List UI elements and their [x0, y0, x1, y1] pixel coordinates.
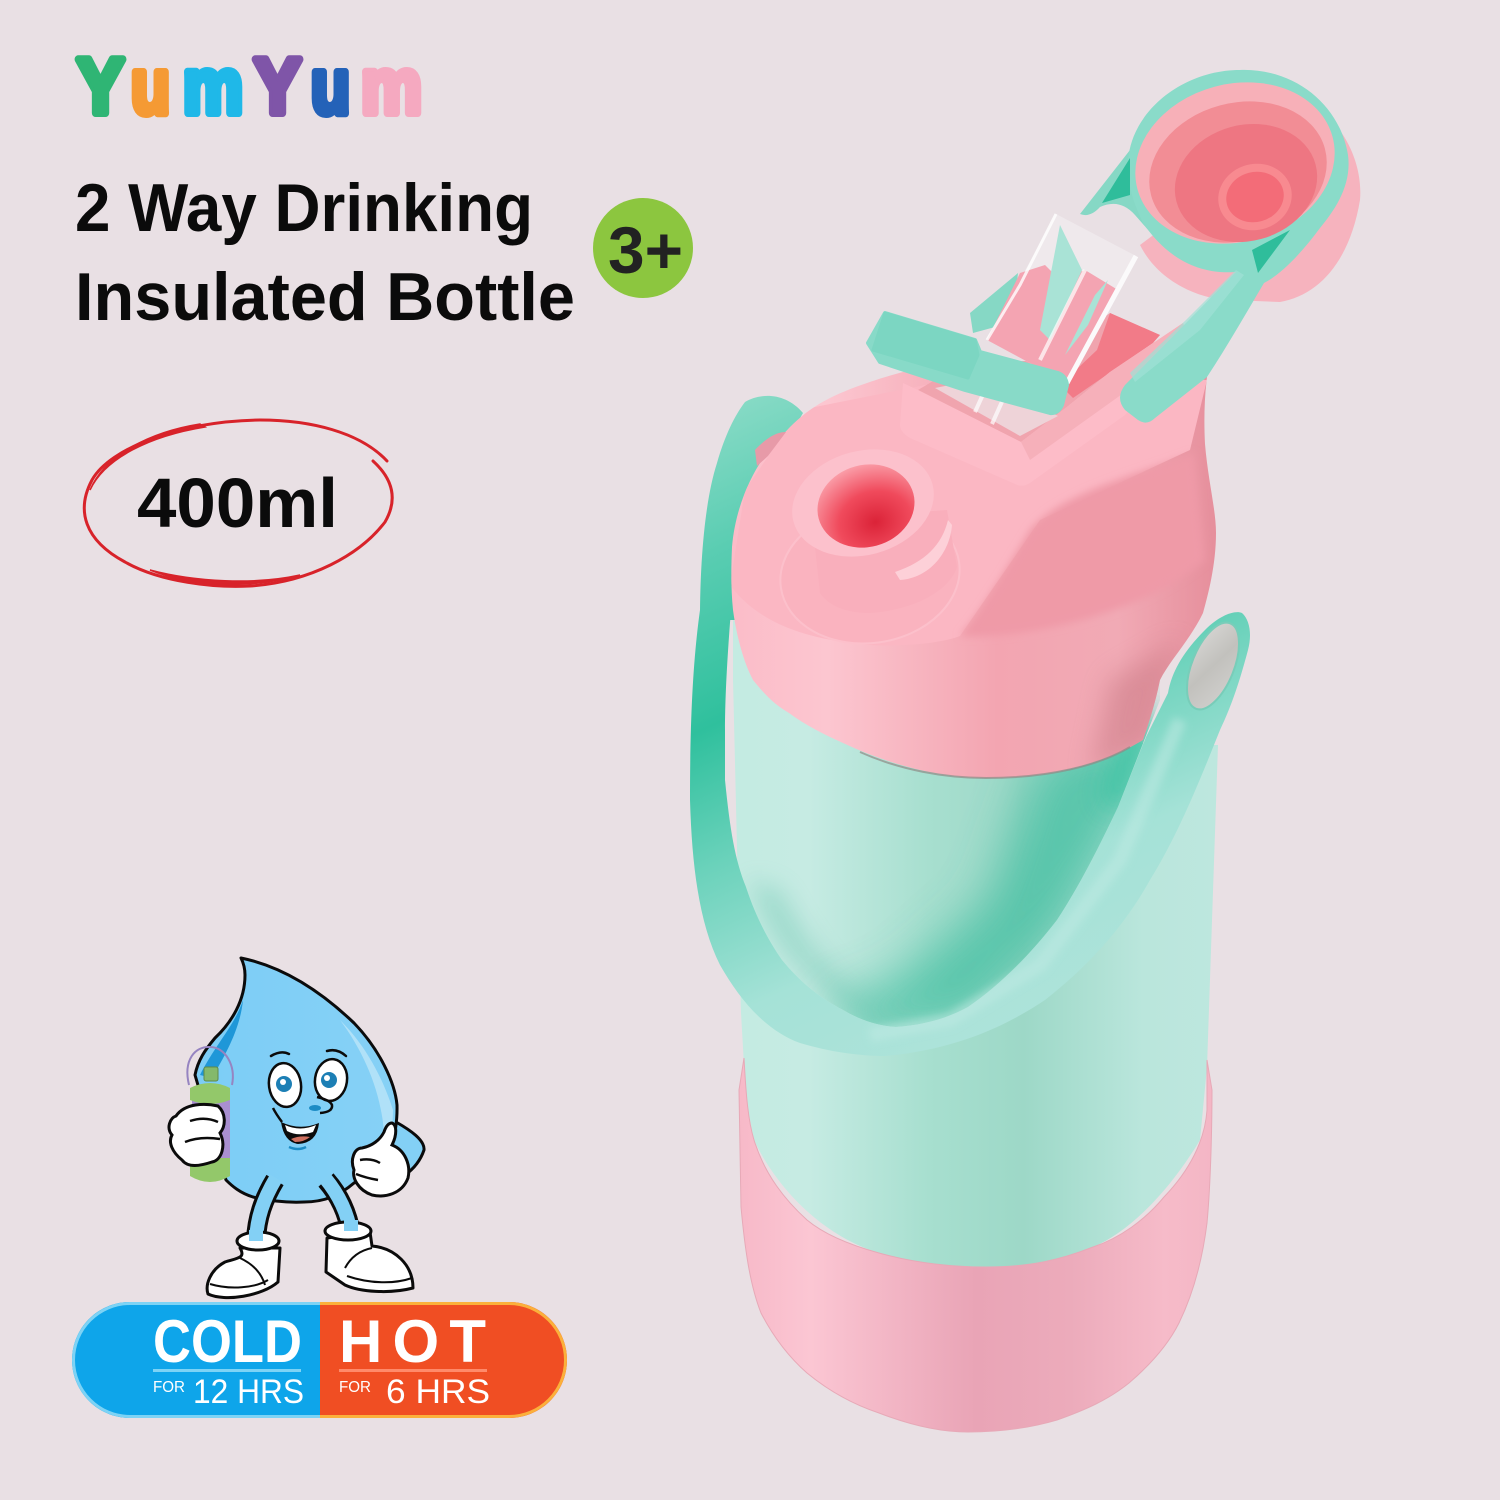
mascot drop body	[195, 958, 397, 1202]
dark gaps in ring	[1102, 158, 1290, 273]
hot label: FOR	[339, 1379, 371, 1396]
spout neck	[812, 510, 957, 613]
logo: YumYum: u	[311, 42, 350, 130]
straw lower part in cavity	[935, 378, 1058, 436]
spout base disc	[771, 495, 969, 655]
back wall	[1060, 313, 1160, 398]
hot half	[320, 1302, 567, 1418]
hot label: HOT	[339, 1308, 486, 1375]
body shadow near strap	[750, 700, 1165, 1035]
title: 2 Way Drinking	[75, 170, 533, 246]
cold label: COLD	[153, 1308, 302, 1375]
cold label: 12 HRS	[193, 1373, 304, 1411]
stud behind strap	[755, 432, 786, 466]
silicone base: pink	[739, 1058, 1212, 1432]
cold label: FOR	[153, 1379, 185, 1396]
logo: YumYum: Y	[77, 42, 124, 130]
mascot: water drop character	[169, 958, 424, 1298]
cap inner cup	[1117, 61, 1353, 265]
lid seam line	[860, 747, 1130, 778]
bottle lid: pink	[730, 370, 1216, 778]
age badge: 3+: 3+	[608, 213, 683, 287]
hot label: 6 HRS	[386, 1373, 490, 1411]
bottle body: mint	[733, 620, 1218, 1267]
ring and carrying arm	[1120, 70, 1349, 423]
mascot legs	[256, 1178, 351, 1240]
mini bottle held by mascot	[187, 1047, 233, 1182]
cap outer pink shell	[1140, 115, 1360, 302]
title	[75, 170, 575, 335]
cavity	[918, 313, 1160, 442]
straw housing block	[900, 313, 1190, 486]
strap: upper left arm behind lid	[700, 396, 803, 620]
strap: main loop and pivot	[690, 610, 1250, 1056]
title: Insulated Bottle	[75, 259, 575, 335]
logo: YumYum: m	[183, 42, 243, 130]
block face and rim	[900, 323, 1190, 486]
mascot face	[266, 1050, 350, 1149]
bottle cap: mint ring, arm and inner cup	[1080, 61, 1353, 423]
glass straw and rear clip	[935, 214, 1136, 436]
cold label	[153, 1308, 304, 1411]
mascot right hand thumbs up	[352, 1123, 409, 1196]
cold half	[72, 1302, 320, 1418]
capacity callout: 400ml in hand-drawn ellipse	[84, 420, 392, 586]
mascot right shoe	[325, 1220, 413, 1292]
spout opening	[808, 454, 924, 558]
logo: YumYum: m	[361, 42, 422, 130]
logo: YumYum	[77, 42, 422, 130]
infographic canvas	[72, 55, 1360, 1432]
straw lever: mint	[868, 313, 1067, 413]
capacity callout: 400ml in hand-drawn ellipse: 400ml	[137, 464, 338, 542]
lid facets and shading	[730, 370, 1207, 775]
metal pivot rivet	[1176, 615, 1250, 717]
mascot left hand	[169, 1104, 224, 1166]
insulation badge: cold / hot pill	[72, 1302, 567, 1418]
strap highlight	[870, 720, 1180, 1035]
drop highlight and shadow	[340, 1020, 393, 1160]
hot label	[339, 1308, 490, 1411]
age badge: 3+	[593, 198, 693, 298]
spout rim	[780, 434, 946, 572]
mascot left shoe	[207, 1230, 280, 1298]
drinking spout on lid	[771, 434, 969, 655]
mascot right arm	[380, 1122, 424, 1175]
left arm of ring	[1080, 150, 1160, 232]
logo: YumYum: u	[131, 42, 170, 130]
logo: YumYum: Y	[254, 42, 301, 130]
